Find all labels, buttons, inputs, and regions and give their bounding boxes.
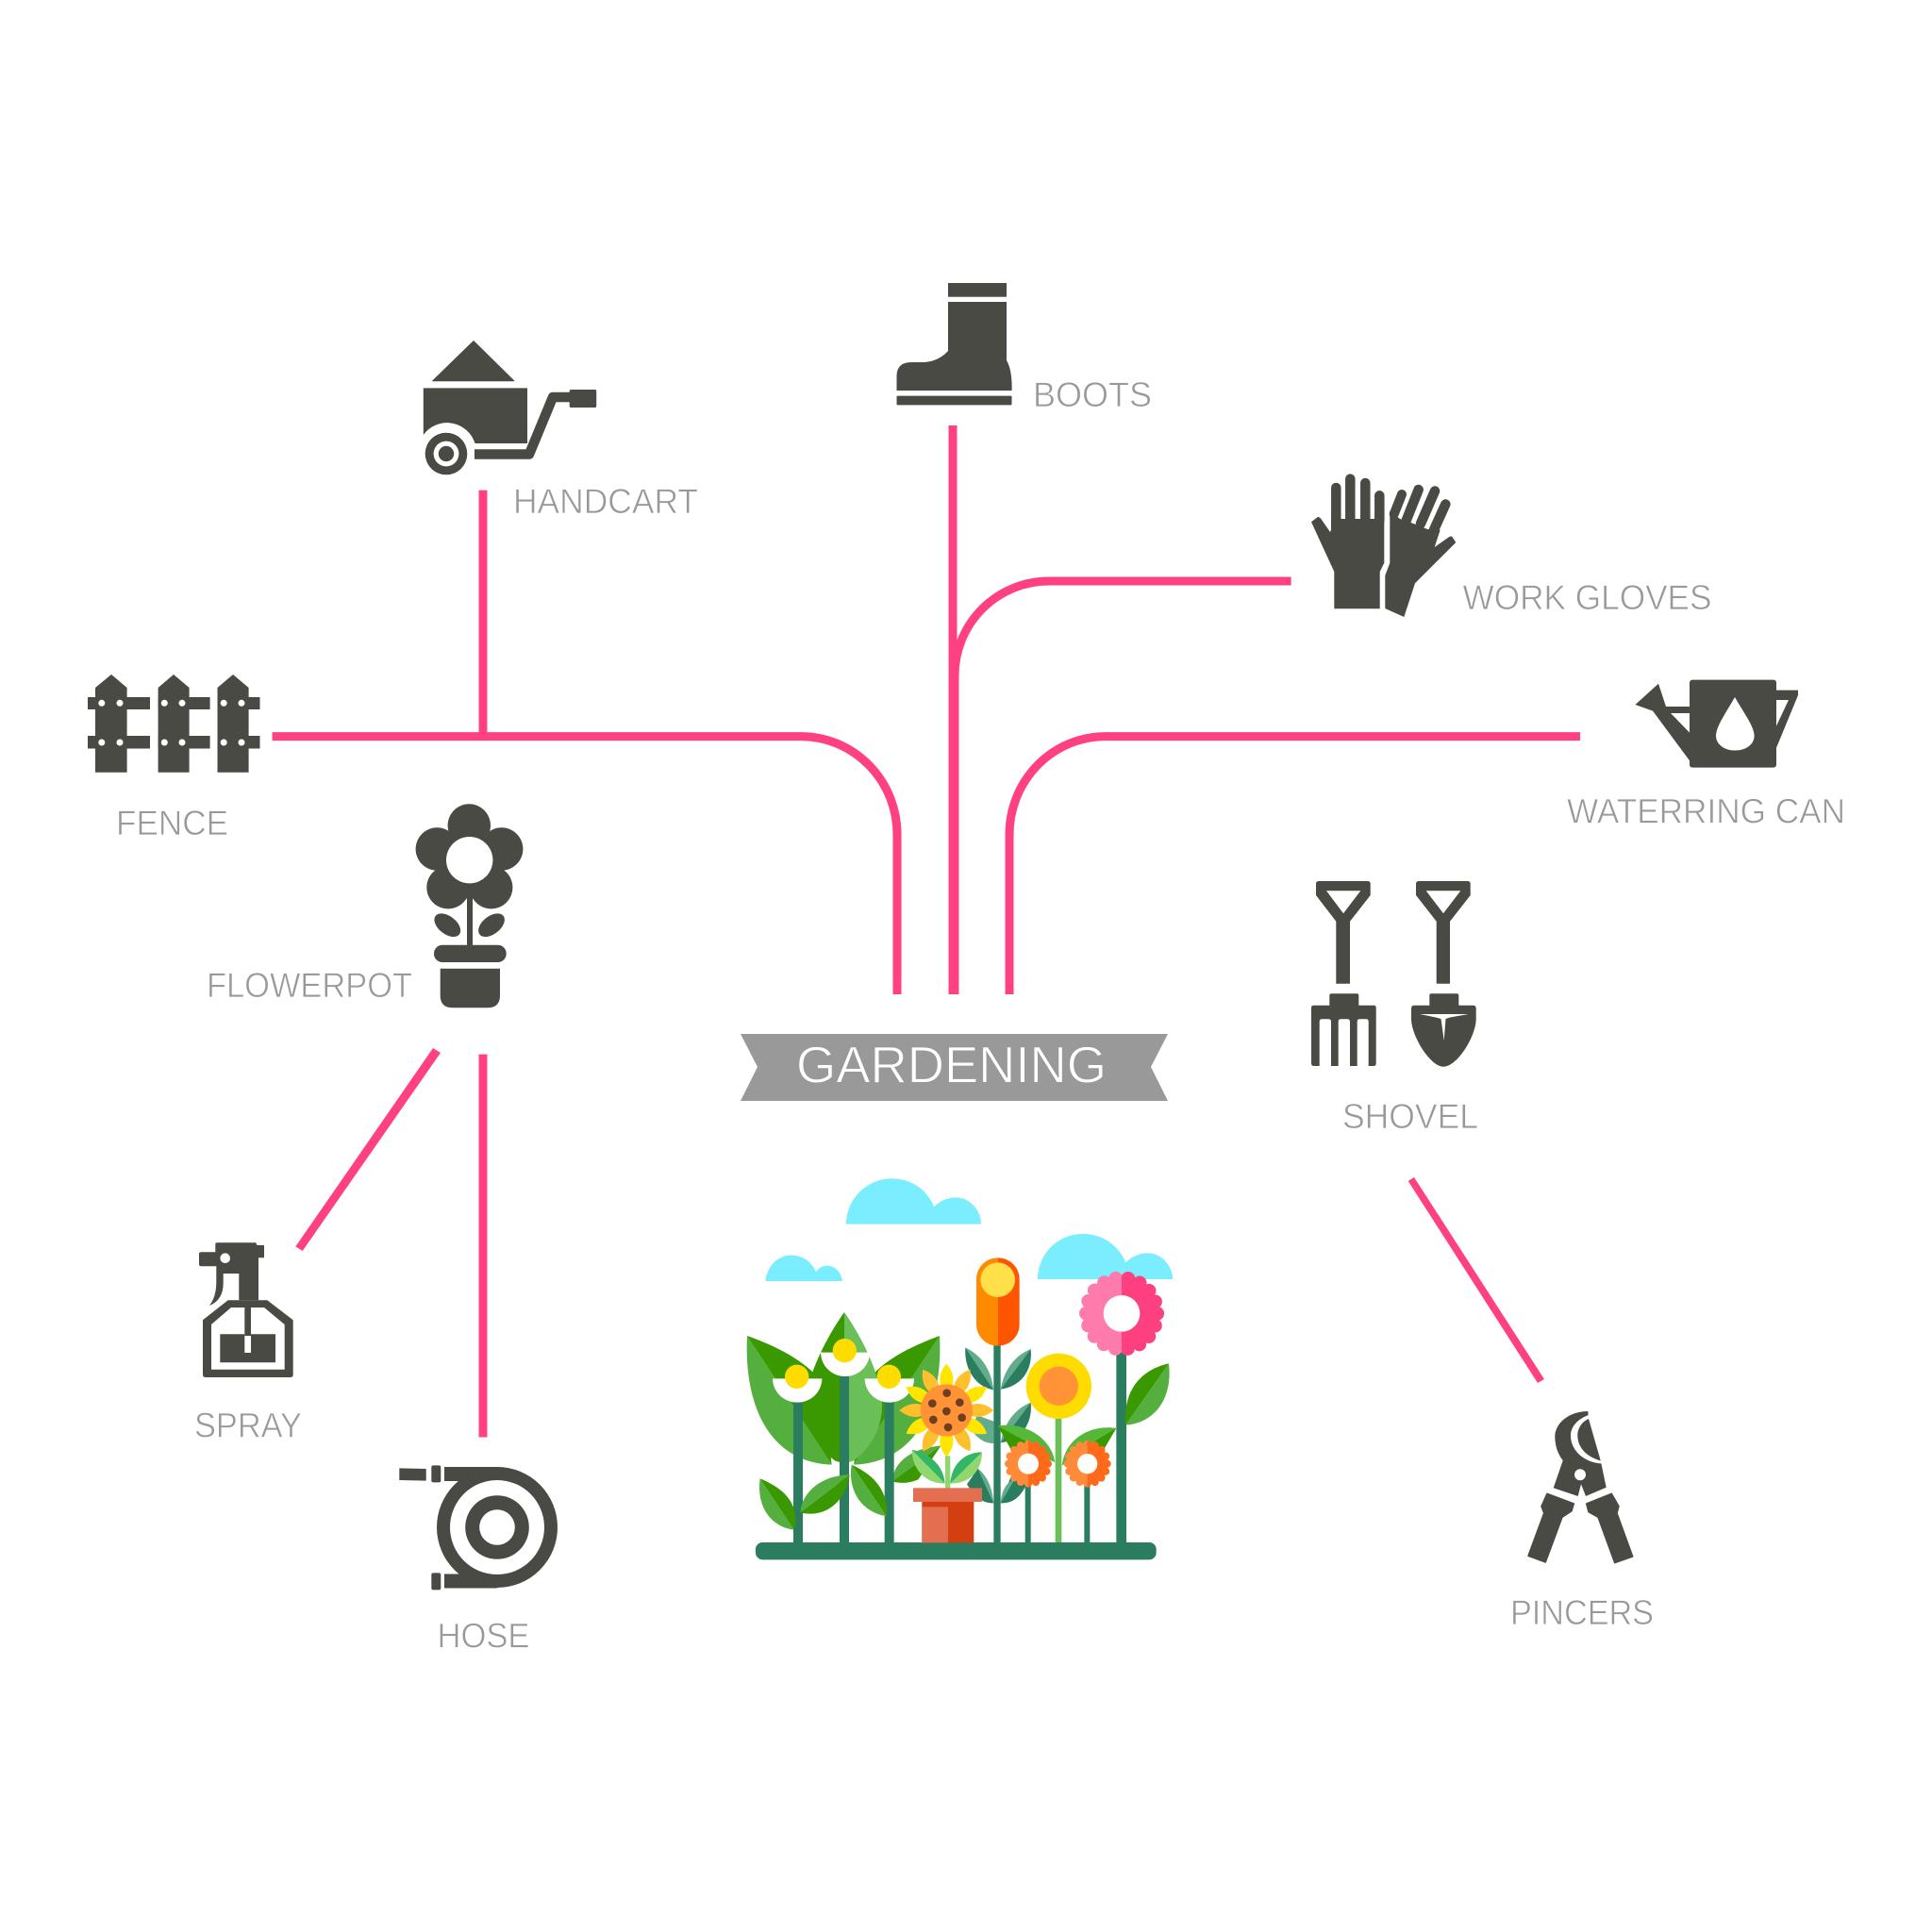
arching green leaves <box>998 1425 1116 1465</box>
teal leaves <box>965 1347 1031 1503</box>
label: spray: SPRAY <box>194 1406 302 1445</box>
icon: pincers <box>1528 1411 1633 1563</box>
big green leaves <box>747 1312 941 1483</box>
clouds <box>765 1178 1173 1281</box>
icon: garden fork <box>1311 881 1376 1066</box>
icon: handcart <box>424 341 596 475</box>
ground rail <box>756 1542 1157 1559</box>
small lower leaves <box>759 1363 1170 1530</box>
banner: gardening title <box>741 1034 1168 1101</box>
label: fence: FENCE <box>116 804 228 842</box>
icon: work gloves <box>1311 479 1456 617</box>
icon: spray <box>199 1242 293 1377</box>
tulip <box>976 1257 1020 1346</box>
sunflower <box>899 1364 993 1457</box>
label: boots: BOOTS <box>1033 375 1152 414</box>
icon: shovel <box>1411 881 1476 1067</box>
label: shovel: SHOVEL <box>1342 1097 1478 1136</box>
stems <box>793 1344 1126 1545</box>
icon: boots <box>896 283 1012 405</box>
label: flowerpot: FLOWERPOT <box>207 966 412 1005</box>
title: GARDENING <box>796 1036 1107 1094</box>
daisy flowers <box>773 1339 914 1403</box>
pink flower <box>1084 1275 1159 1351</box>
potted seedling <box>912 1450 982 1542</box>
yellow round flower <box>1026 1354 1091 1419</box>
icon: hose <box>399 1465 558 1590</box>
illustration: garden scene <box>747 1178 1173 1559</box>
label: hose: HOSE <box>438 1617 530 1655</box>
label: handcart: HANDCART <box>513 482 698 521</box>
icon: flowerpot <box>416 804 523 1008</box>
label: pincers: PINCERS <box>1510 1593 1654 1632</box>
icon: watering can <box>1635 680 1798 768</box>
label: watering can: WATERRING CAN <box>1567 792 1845 831</box>
orange flowers <box>1008 1443 1108 1485</box>
connector lines <box>273 425 1580 1438</box>
icon: fence <box>88 675 260 773</box>
icon: fork and shovel <box>1311 881 1476 1067</box>
label: work gloves: WORK GLOVES <box>1462 578 1711 617</box>
